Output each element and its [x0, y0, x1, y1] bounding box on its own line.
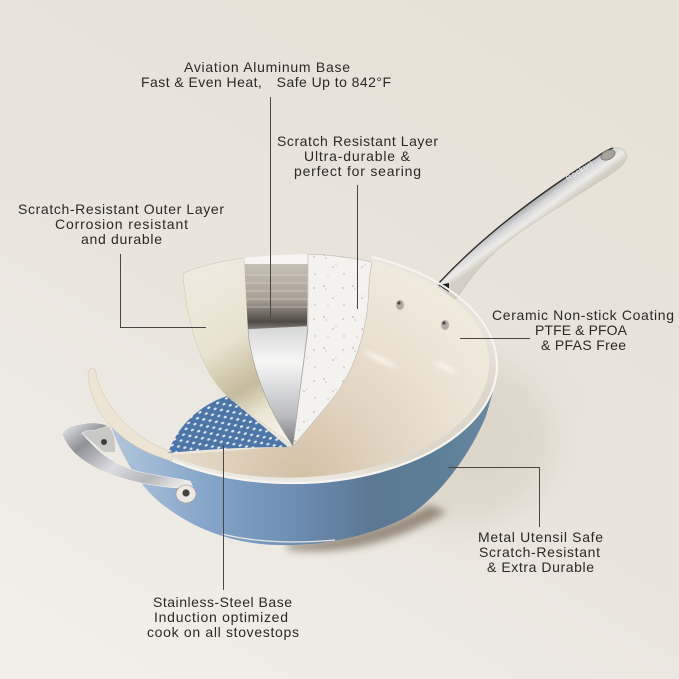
steel aluminum layer — [244, 254, 308, 446]
label: aviation aluminum base: Fast & Even Heat, Safe Up to 842°F — [141, 74, 391, 90]
label: stainless steel base: Induction optimized — [154, 609, 288, 625]
cut rim strip — [88, 368, 172, 461]
label: outer layer: Scratch-Resistant Outer Layer — [18, 201, 224, 217]
leader lines — [120, 97, 540, 590]
icon: loop helper handle — [62, 423, 196, 503]
label: scratch resistant layer — [277, 133, 438, 179]
label: outer layer: Corrosion resistant — [55, 216, 188, 232]
label: ceramic coating: & PFAS Free — [541, 337, 626, 353]
label: metal utensil safe: Metal Utensil Safe — [478, 529, 603, 545]
label: stainless steel base: cook on all stovestops — [147, 624, 299, 640]
icon: long steel handle — [438, 148, 627, 300]
pan shadow on surface — [285, 355, 555, 551]
label: aviation aluminum base: Aviation Aluminum Base — [184, 59, 350, 75]
label: metal utensil safe — [478, 529, 603, 575]
interior highlights — [362, 350, 458, 375]
label: scratch resistant layer: perfect for searing — [294, 163, 421, 179]
label: scratch resistant layer: Scratch Resistant Layer — [277, 133, 438, 149]
pan base highlight — [222, 534, 335, 542]
gold outer layer — [183, 258, 293, 446]
label: ceramic coating: PTFE & PFOA — [535, 322, 628, 338]
blue perforated base layer — [168, 396, 288, 453]
label: stainless steel base: Stainless-Steel Base — [153, 594, 292, 610]
label: outer layer — [18, 201, 224, 247]
ceramic interior — [168, 260, 489, 478]
label: scratch resistant layer: Ultra-durable & — [304, 148, 411, 164]
label: aviation aluminum base — [141, 59, 391, 90]
icon: long steel handle: Rockurl — [564, 159, 595, 183]
label: outer layer: and durable — [81, 231, 162, 247]
label: metal utensil safe: & Extra Durable — [487, 559, 594, 575]
speckled scratch resistant layer — [293, 254, 372, 446]
label: ceramic coating: Ceramic Non-stick Coating — [492, 307, 674, 323]
label: ceramic coating — [492, 307, 674, 353]
label: stainless steel base — [147, 594, 299, 640]
label: metal utensil safe: Scratch-Resistant — [479, 544, 600, 560]
pan rim — [168, 257, 497, 483]
pan body — [108, 365, 497, 545]
rivets — [396, 300, 449, 330]
